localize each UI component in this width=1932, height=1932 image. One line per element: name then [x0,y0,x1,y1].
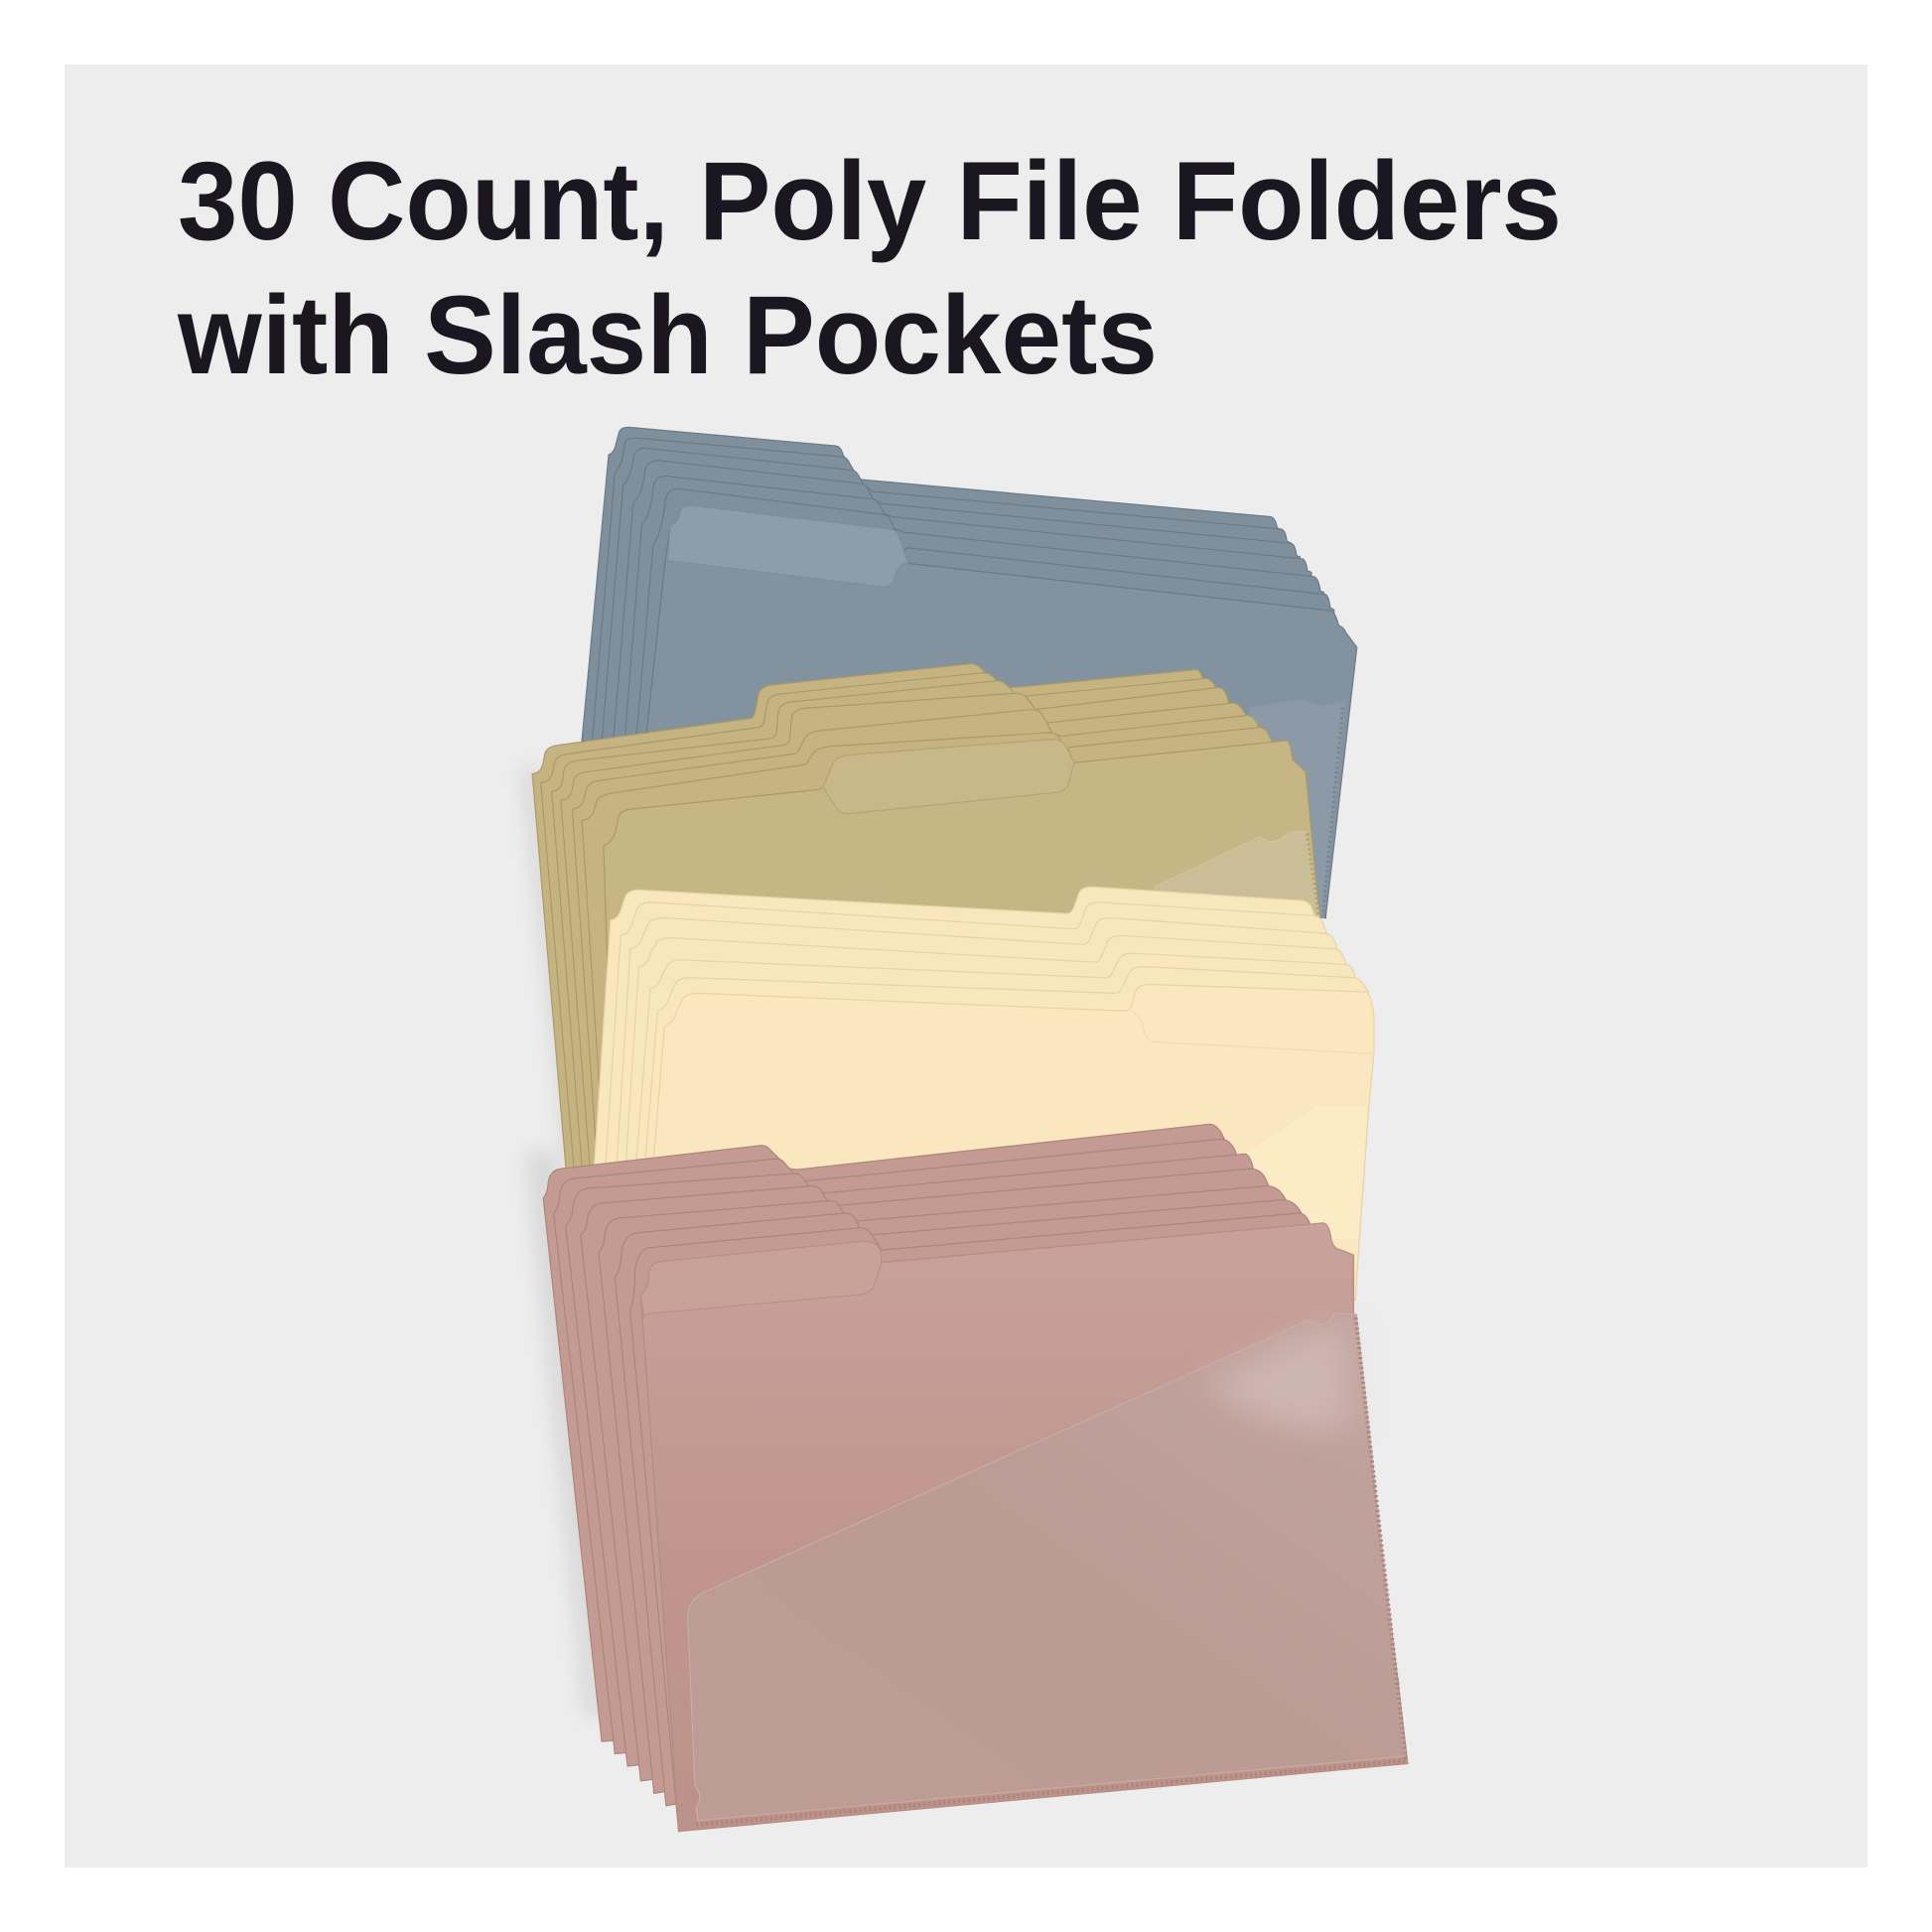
blue slash pocket [1249,699,1345,918]
khaki front tab outline [823,740,1074,814]
title: with Slash Pockets [177,273,1158,397]
folder stack: pink [543,1124,1408,1832]
khaki pocket perforated edge [1307,834,1319,918]
cream front tab line [1131,1011,1374,1054]
folder stack: cream [587,887,1374,1301]
pink slash pocket [688,1313,1405,1821]
khaki slash pocket [1152,831,1319,920]
title [177,139,1562,397]
folder stack: blue [582,427,1357,918]
pocket highlight [1206,1329,1350,1430]
folder stack: khaki [532,664,1319,1195]
pink pocket perforated edge [696,1315,1406,1825]
cream slash pocket [1237,1106,1367,1239]
blue pocket perforated edge [1322,707,1342,915]
soft shadows behind folder stacks [521,764,606,1718]
blue front tab [667,505,907,587]
title: 30 Count, Poly File Folders [178,139,1562,263]
pink front tab [640,1241,882,1316]
